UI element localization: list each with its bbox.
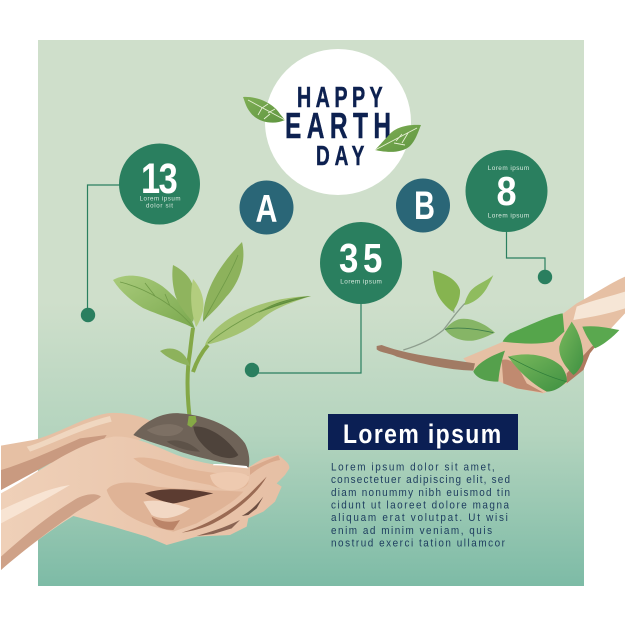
body text block: cidunt ut laoreet dolore magna bbox=[331, 499, 509, 512]
hand shading bbox=[1, 494, 101, 570]
title text: HAPPY bbox=[297, 82, 383, 114]
connector: 35 bbox=[252, 302, 361, 373]
body text block: enim ad minim veniam, quis bbox=[331, 524, 492, 537]
title text: DAY bbox=[316, 140, 364, 172]
body text block: aliquam erat volutpat. Ut wisi bbox=[331, 511, 508, 524]
body text block: Lorem ipsum dolor sit amet, bbox=[331, 461, 495, 474]
badge: B bbox=[396, 178, 450, 232]
branch bbox=[377, 345, 475, 371]
badge: A: A bbox=[256, 187, 277, 231]
stat circle: 13: Lorem ipsum bbox=[140, 196, 180, 203]
front hand bbox=[1, 437, 289, 570]
heading bar: Lorem ipsum bbox=[343, 419, 501, 449]
stat circle: 13: dolor sit bbox=[146, 203, 173, 210]
heading bar bbox=[328, 414, 518, 450]
badge: B: B bbox=[414, 183, 435, 228]
twig with hand and leaves bbox=[377, 271, 625, 393]
stat circle: 8: Lorem ipsum bbox=[488, 165, 529, 172]
icon: right title leaf bbox=[375, 125, 421, 152]
title text: EARTH bbox=[285, 105, 391, 146]
hands holding soil bbox=[1, 413, 289, 570]
leaf: centre bbox=[191, 279, 204, 327]
stat circle: 35: 35 bbox=[339, 236, 382, 282]
arm and hand bbox=[463, 277, 625, 393]
connector: 8 bbox=[506, 232, 545, 277]
back hand bbox=[1, 413, 152, 490]
stat circle: 13: 13 bbox=[141, 155, 178, 203]
title badge bbox=[265, 49, 411, 195]
leaf: hand top bbox=[503, 313, 564, 344]
twig stem bbox=[403, 301, 465, 350]
stat circle: 8: Lorem ipsum bbox=[488, 212, 529, 219]
body text block bbox=[331, 461, 510, 550]
leaf: top right bbox=[203, 242, 243, 322]
stat circle: 35: Lorem ipsum bbox=[340, 278, 382, 286]
title text bbox=[285, 82, 391, 172]
soil mound bbox=[133, 413, 249, 468]
stem bbox=[187, 328, 208, 428]
body text block: diam nonummy nibh euismod tin bbox=[331, 486, 510, 499]
connector dot: 8 bbox=[538, 270, 552, 284]
body text block: consectetuer adipiscing elit, sed bbox=[331, 473, 510, 486]
seedling plant bbox=[113, 242, 311, 428]
stat circle: 35 bbox=[320, 222, 402, 304]
sprout base bbox=[187, 416, 197, 427]
icon: left title leaf bbox=[243, 97, 285, 123]
leaf: twig top right bbox=[464, 275, 493, 305]
stat circle: 8 bbox=[466, 150, 548, 232]
leaf: large left bbox=[113, 276, 195, 329]
leaf: small lower bbox=[160, 349, 190, 366]
leaf: centre left bbox=[172, 265, 195, 322]
stat circle: 13 bbox=[119, 144, 200, 224]
connector dot: 13 bbox=[81, 308, 95, 322]
leaf: arm bbox=[582, 326, 619, 348]
leaf: fingers left bbox=[473, 351, 505, 382]
leaf: fingers front bbox=[508, 354, 567, 392]
leaf: wrist bbox=[559, 322, 583, 375]
badge: A bbox=[240, 180, 294, 234]
stat circle: 8: 8 bbox=[496, 169, 517, 215]
leaf: twig lower bbox=[445, 319, 495, 341]
connector: 13 bbox=[88, 185, 120, 315]
leaf: twig top left bbox=[433, 271, 460, 312]
body text block: nostrud exerci tation ullamcor bbox=[331, 537, 505, 550]
connector dot: 35 bbox=[245, 363, 259, 377]
leaf: long right bbox=[205, 296, 311, 345]
background panel bbox=[38, 40, 584, 586]
